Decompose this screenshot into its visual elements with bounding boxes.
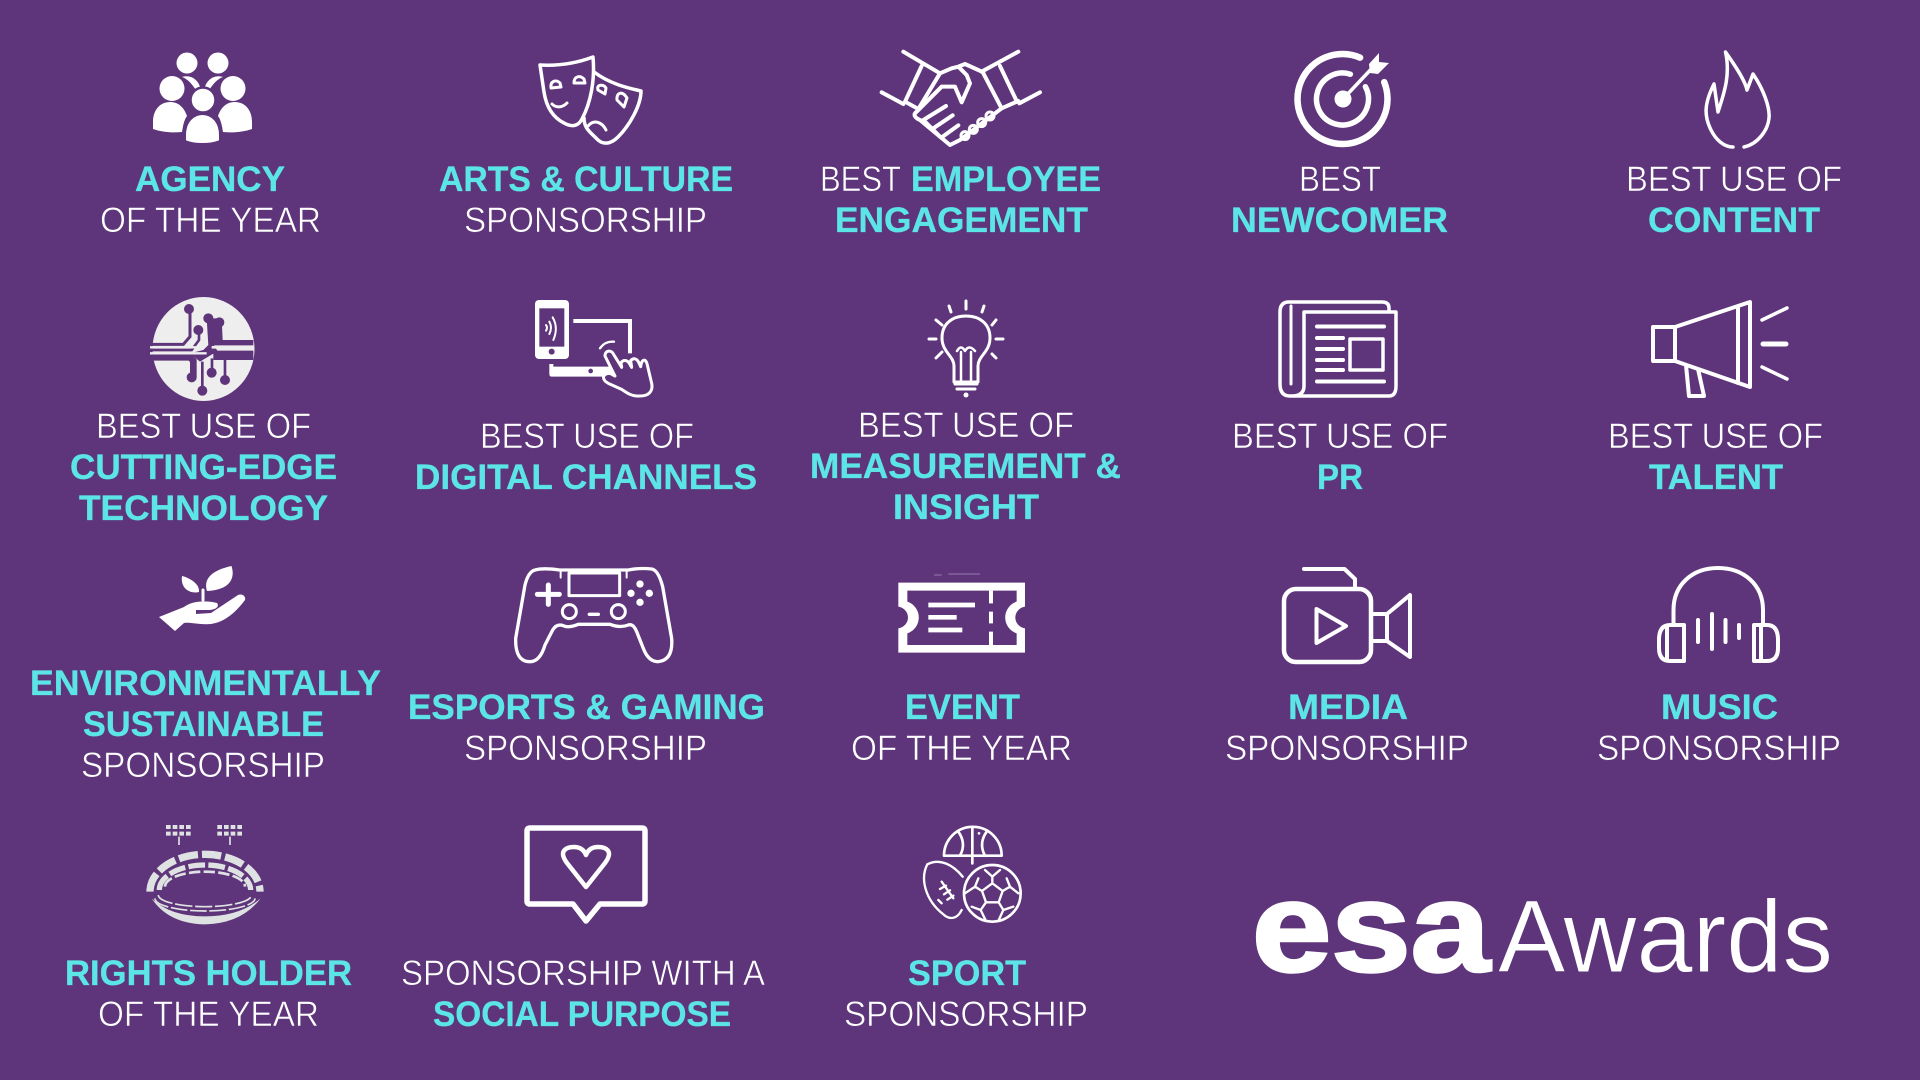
category: esports and gaming sponsorship [408, 569, 765, 768]
icon: stadium [150, 825, 261, 924]
label: best use of digital channels [415, 417, 757, 497]
label: sport sponsorship: SPONSORSHIP [844, 995, 1088, 1034]
label: arts and culture sponsorship: ARTS & CULTURE [439, 160, 733, 199]
label: environmentally sustainable sponsorship: SUSTAINABLE [83, 705, 324, 744]
label: best use of digital channels: BEST USE OF [480, 417, 694, 456]
label: media sponsorship: SPONSORSHIP [1225, 729, 1469, 768]
label: best employee engagement: ENGAGEMENT [835, 201, 1088, 240]
label: esports and gaming sponsorship: ESPORTS & GAMING [408, 688, 765, 727]
label: best newcomer: BEST [1299, 160, 1381, 199]
label: rights holder of the year: RIGHTS HOLDER [65, 954, 352, 993]
label: best use of content: BEST USE OF [1626, 160, 1842, 199]
label: music sponsorship: SPONSORSHIP [1597, 729, 1841, 768]
category: best use of digital channels [415, 300, 757, 497]
label: best use of talent: TALENT [1649, 458, 1783, 497]
label: sponsorship with a social purpose: SPONSORSHIP WITH A [401, 954, 766, 993]
category: sport sponsorship [844, 827, 1088, 1034]
label: best employee engagement: BEST [820, 160, 901, 199]
label: best use of talent: BEST USE OF [1608, 417, 1823, 456]
label: event of the year: EVENT [905, 688, 1020, 727]
icon: hand holding plant [159, 566, 245, 631]
label: best use of cutting-edge technology [70, 407, 337, 528]
label: event of the year [851, 688, 1072, 768]
category: sponsorship with a social purpose [401, 828, 766, 1034]
icon: target with arrow [1284, 40, 1401, 158]
icon: game controller [516, 569, 672, 662]
label: best use of measurement and insight: MEASUREMENT & [810, 447, 1121, 486]
label: best use of digital channels: DIGITAL CHANNELS [415, 458, 757, 497]
label: best use of content: CONTENT [1648, 201, 1820, 240]
category: agency of the year [100, 52, 321, 240]
label: best use of pr [1232, 417, 1448, 497]
icon: megaphone [1653, 302, 1787, 396]
label: best use of measurement and insight [810, 406, 1121, 527]
label: best use of cutting-edge technology: CUTTING-EDGE [70, 448, 337, 487]
icon: group of people [153, 52, 252, 144]
label: best use of talent [1608, 417, 1823, 497]
label: best employee engagement [820, 160, 1101, 240]
icon: newspaper [1280, 302, 1396, 396]
logo: ESA Awards: Awards [1498, 879, 1833, 994]
label: rights holder of the year: OF THE YEAR [98, 995, 319, 1034]
label: agency of the year: AGENCY [135, 160, 285, 199]
label: best use of cutting-edge technology: BEST USE OF [96, 407, 311, 446]
category: best use of measurement and insight [810, 301, 1121, 527]
icon: theatre masks [540, 57, 641, 143]
label: sponsorship with a social purpose [401, 954, 766, 1034]
icon: headphones with sound bars [1659, 568, 1778, 661]
label: best newcomer: NEWCOMER [1231, 201, 1448, 240]
category: environmentally sustainable sponsorship [30, 566, 381, 785]
category: arts and culture sponsorship [439, 57, 733, 240]
label: arts and culture sponsorship [439, 160, 733, 240]
label: best newcomer [1231, 160, 1448, 240]
icon: ticket [898, 574, 1025, 653]
label: agency of the year: OF THE YEAR [100, 201, 321, 240]
category: event of the year [851, 574, 1072, 768]
icon: flame [1706, 52, 1769, 147]
icon: circuit globe [150, 297, 254, 401]
label: best use of pr: PR [1317, 458, 1363, 497]
label: arts and culture sponsorship: SPONSORSHIP [464, 201, 707, 240]
label: environmentally sustainable sponsorship [30, 664, 381, 785]
icon: phone, tablet and hand [535, 300, 652, 396]
category: best use of cutting-edge technology [70, 297, 337, 528]
label: media sponsorship [1225, 688, 1469, 768]
label: best use of measurement and insight: BEST USE OF [858, 406, 1074, 445]
label: best use of content [1626, 160, 1842, 240]
label: music sponsorship [1597, 688, 1841, 768]
category: best newcomer [1231, 40, 1448, 240]
category: media sponsorship [1225, 569, 1469, 768]
label: best use of measurement and insight: INSIGHT [893, 488, 1039, 527]
label: sport sponsorship: SPORT [908, 954, 1026, 993]
icon: sports balls [924, 827, 1021, 922]
label: environmentally sustainable sponsorship: ENVIRONMENTALLY [30, 664, 381, 703]
label: best use of cutting-edge technology: TECHNOLOGY [79, 489, 328, 528]
label: agency of the year [100, 160, 321, 240]
icon: video camera [1284, 569, 1410, 662]
category: best use of talent [1608, 302, 1823, 497]
label: sport sponsorship [844, 954, 1088, 1034]
label: event of the year: OF THE YEAR [851, 729, 1072, 768]
label: rights holder of the year [65, 954, 352, 1034]
logo: ESA Awards: esa [1252, 856, 1492, 998]
category: best employee engagement [820, 52, 1101, 240]
label: best use of pr: BEST USE OF [1232, 417, 1448, 456]
label: media sponsorship: MEDIA [1288, 688, 1408, 727]
label: esports and gaming sponsorship [408, 688, 765, 768]
label: sponsorship with a social purpose: SOCIAL PURPOSE [433, 995, 731, 1034]
label: esports and gaming sponsorship: SPONSORSHIP [464, 729, 707, 768]
label: music sponsorship: MUSIC [1661, 688, 1778, 727]
category: best use of content [1626, 52, 1842, 240]
icon: speech bubble with heart [527, 828, 645, 921]
category: rights holder of the year [65, 825, 352, 1034]
category: music sponsorship [1597, 568, 1841, 768]
logo: ESA Awards [1252, 856, 1833, 998]
label: best employee engagement: EMPLOYEE [911, 160, 1101, 199]
icon: handshake [882, 52, 1040, 145]
icon: light bulb [929, 301, 1003, 398]
category: best use of pr [1232, 302, 1448, 497]
label: environmentally sustainable sponsorship: SPONSORSHIP [81, 746, 325, 785]
